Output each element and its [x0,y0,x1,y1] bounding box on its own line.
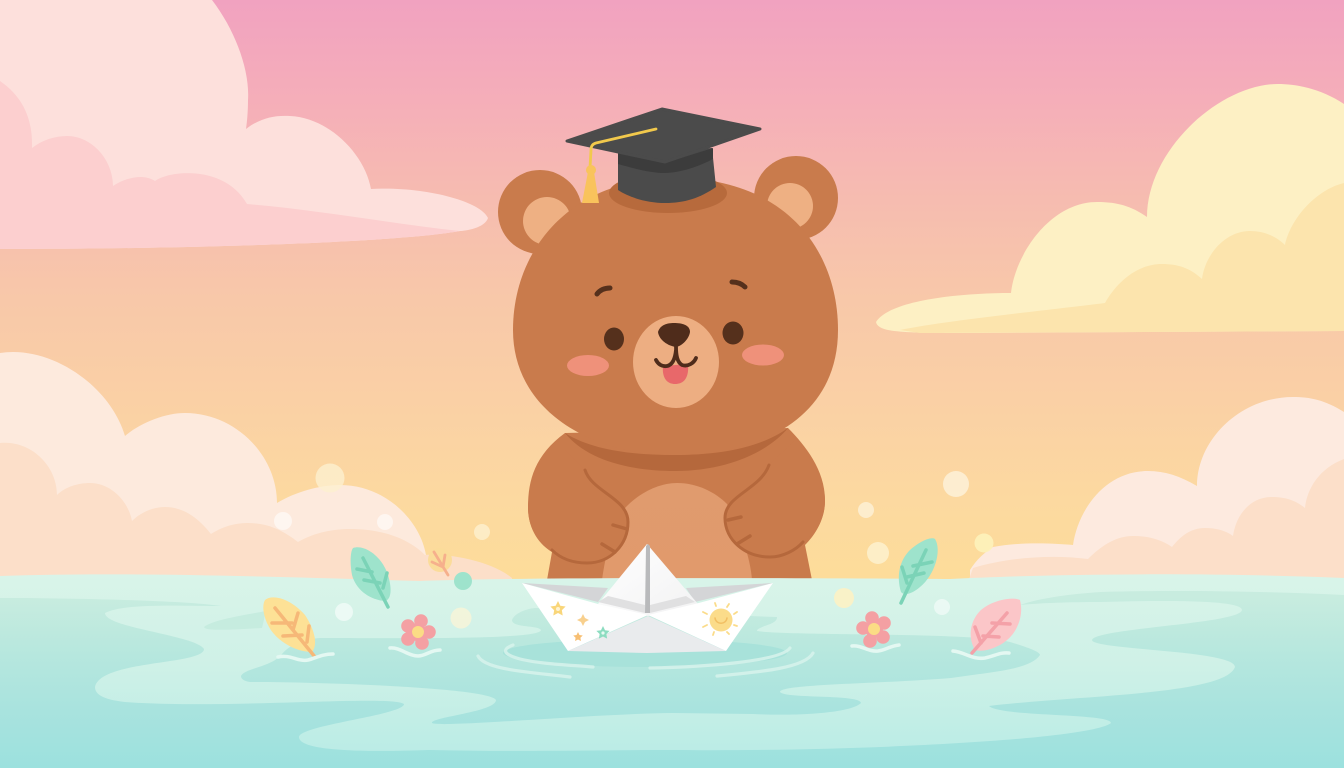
leaf: yellow [263,597,315,657]
bear face [567,282,784,408]
bear [498,109,838,580]
floating bubbles [274,464,994,628]
cloud: lower left peach [0,352,512,585]
wave under yellow leaf [278,654,333,660]
boat decoration: sun [703,603,737,635]
cloud: lower right peach [967,397,1344,585]
graduation cap [567,109,760,213]
boat sail [598,544,698,616]
water [0,574,1344,768]
bear body and arms [528,428,825,580]
small leaf [428,548,452,575]
cloud: top left pink [0,0,488,249]
paper boat [478,544,813,677]
cap tassel [582,165,599,203]
bear ears [498,156,838,254]
leaf: green left [351,547,391,607]
flower: left [401,614,436,650]
leaf: green right [899,538,938,603]
water shadow under boat [503,639,787,667]
water pocket [204,611,266,630]
boat ripples [478,645,813,677]
boat hull [522,583,773,653]
wave under left flower [390,648,440,656]
boat decorations: stars [550,601,610,641]
bear head [513,178,838,455]
leaf: pink [971,599,1021,653]
cloud: top right yellow [876,84,1344,333]
wave under pink leaf [953,651,1009,658]
bear collar shadow [565,428,788,471]
flower: right [856,611,891,648]
boat back folds [522,583,773,602]
wave under right flower [852,645,899,651]
water pool around boat [241,608,1040,724]
